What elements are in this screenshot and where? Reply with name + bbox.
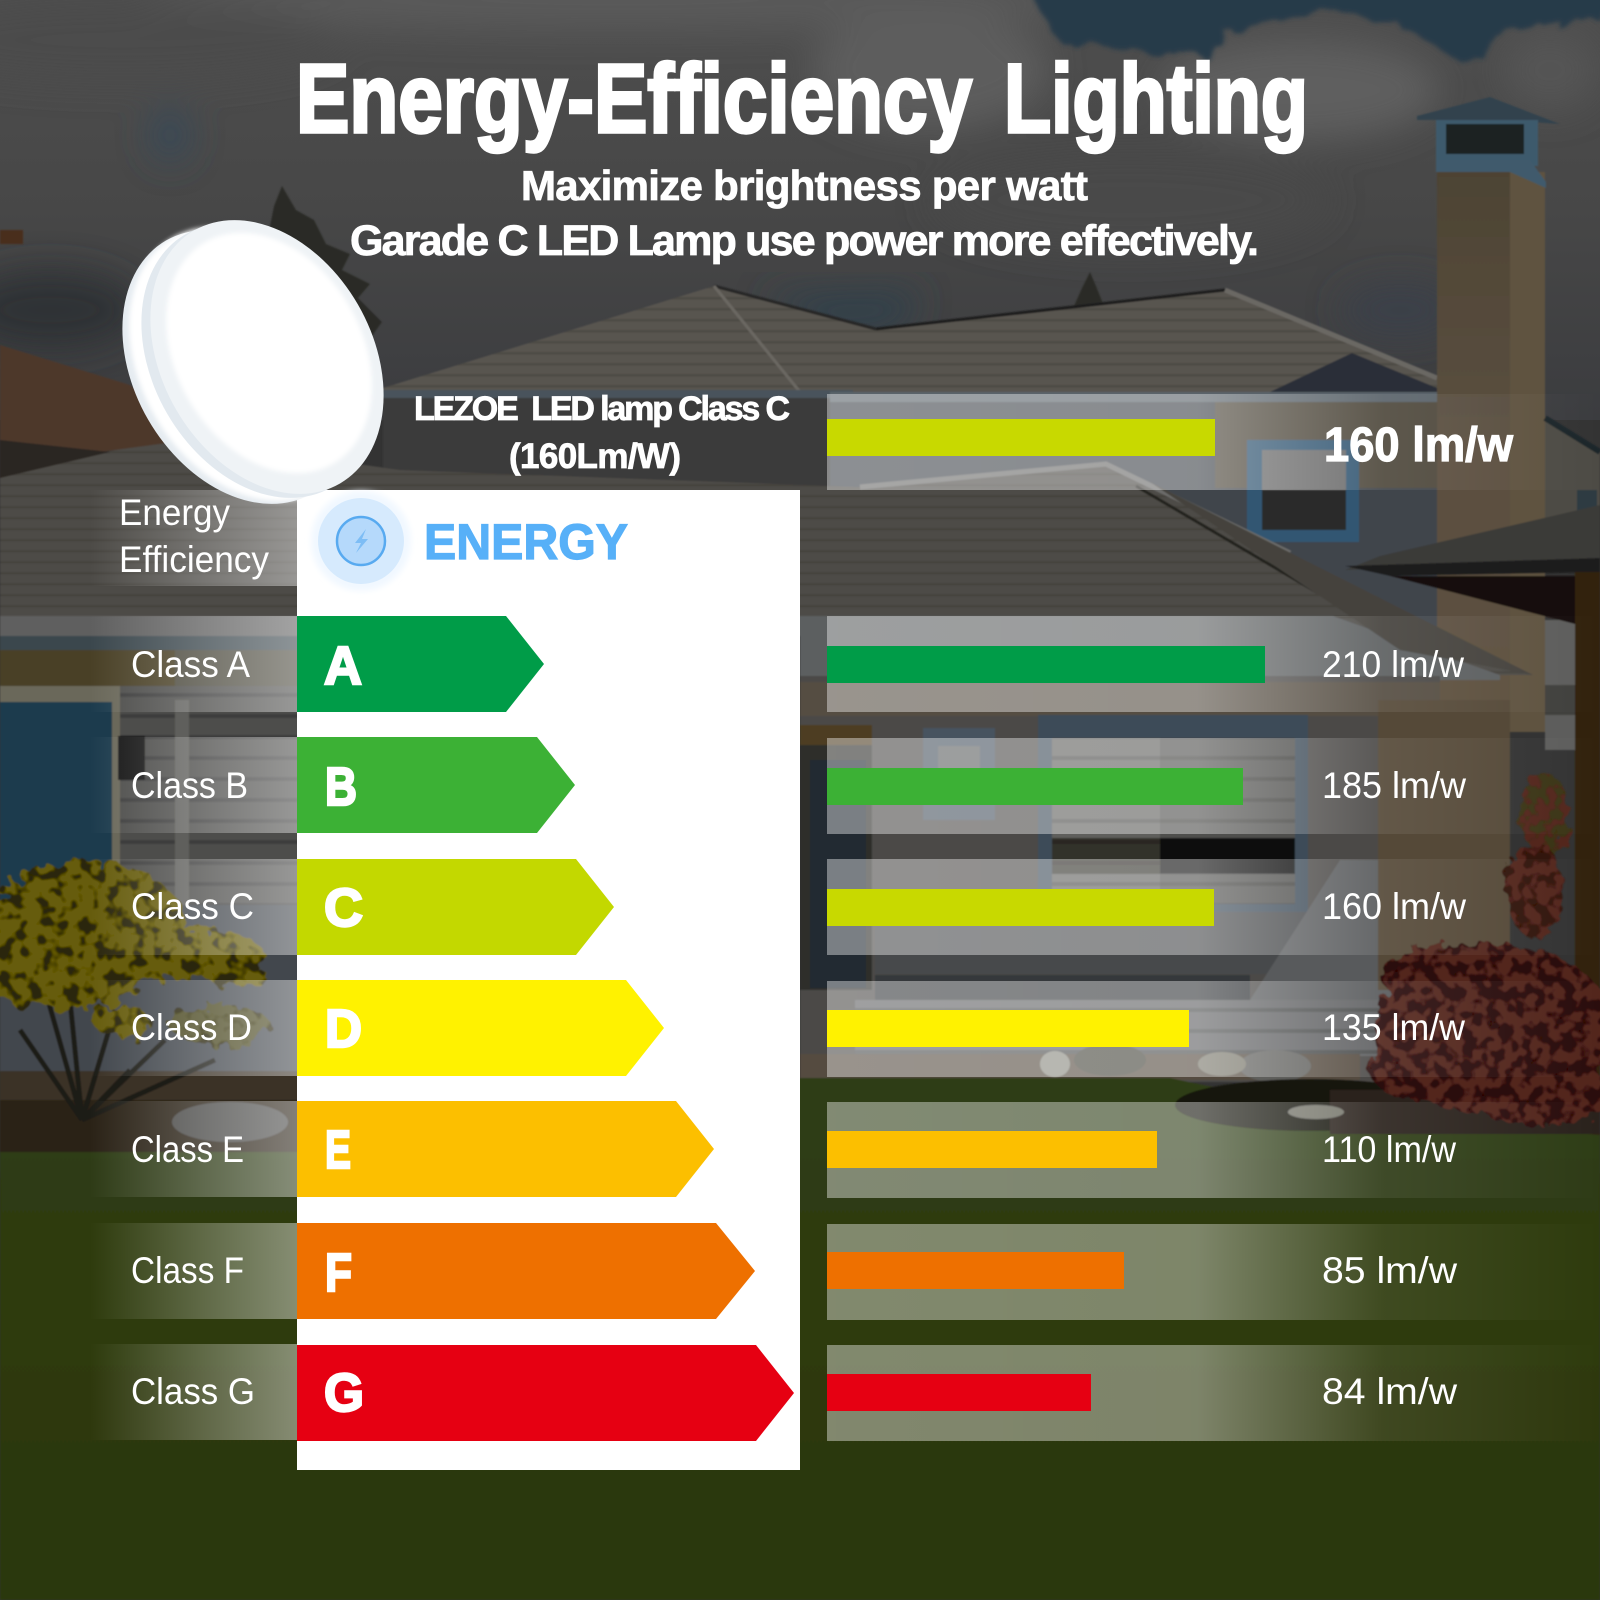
yellow shrub [0,861,270,1120]
arrow: class B: B [325,757,357,817]
arrow: class F [297,1223,755,1319]
subtitle [350,162,1259,265]
product label: (160Lm/W) [509,437,681,476]
row labels [119,492,269,1412]
bar: class G 84 lm/w [827,1374,1091,1411]
value labels: 84 lm/w [1322,1371,1457,1412]
bar: class D 135 lm/w [827,1010,1189,1047]
lawn [0,1078,1600,1600]
panel: white energy label card [297,490,800,1470]
arrow: class F: F [325,1243,352,1303]
small right shrub [1507,773,1569,938]
subtitle: Garade C LED Lamp use power more effectively. [350,217,1259,265]
mulch and lawn shadow [0,1079,1600,1152]
row labels: Class G [131,1371,255,1412]
chimney [1417,97,1560,732]
arrow: class A [297,616,544,712]
bar: class C 160 lm/w [827,889,1214,926]
heading: ENERGY: ENERGY [424,514,628,570]
arrow: class D: D [325,999,362,1059]
bar: class E 110 lm/w [827,1131,1157,1168]
upper wall with window [383,390,1450,632]
arrow: class G: G [324,1363,364,1423]
conifer trees behind roof [266,186,1104,366]
row labels: Energy [119,492,230,533]
bar: class F 85 lm/w [827,1252,1124,1289]
icon: energy bolt badge [311,491,411,591]
icon: round LED ceiling lamp [75,178,431,546]
arrow: class E: E [325,1120,351,1180]
portico roof and column [1345,505,1600,1232]
value labels: 185 lm/w [1322,765,1466,806]
bar: LEZOE 160 lm/w [827,419,1215,456]
title: Lighting [1004,44,1308,153]
rating arrows A to G [297,616,794,1441]
arrow: class G [297,1345,794,1441]
lower wall, door and windows [800,616,1510,1082]
product label [414,390,790,476]
value labels: 110 lm/w [1322,1129,1456,1170]
left wall, garage door and siding [0,616,800,1101]
row labels: Class A [131,644,250,685]
row labels: Class C [131,886,254,927]
arrow: class A: A [324,636,362,696]
value labels [1322,644,1466,1412]
arrow: class C [297,859,614,955]
left brown roof [0,230,190,478]
value labels: 85 lm/w [1322,1250,1457,1291]
value labels: 210 lm/w [1322,644,1464,685]
value labels: 160 lm/w [1322,886,1466,927]
sky and clouds [0,0,1600,420]
right side wing beyond chimney [1545,418,1600,750]
lower roof [0,438,1533,675]
value labels: 135 lm/w [1322,1007,1465,1048]
title: Energy-Efficiency [296,44,972,153]
row labels: Class F [131,1250,244,1291]
arrow: class B [297,737,575,833]
subtitle: Maximize brightness per watt [521,162,1088,209]
row labels: Efficiency [119,539,269,580]
product label: LEZOE LED lamp Class C [414,390,790,428]
bar: class B 185 lm/w [827,768,1243,805]
red shrub [1370,945,1600,1125]
panel: right value bands [827,394,1600,1441]
bar: class A 210 lm/w [827,646,1265,683]
panel: left label bands [90,490,297,1440]
arrow: class C: C [324,878,363,938]
bar chart: lumens per watt [827,419,1265,1411]
row labels: Class D [131,1007,252,1048]
arrow: class D [297,980,664,1076]
product value: 160 lm/w [1324,419,1514,472]
arrow: class E [297,1101,714,1197]
upper main roof [383,286,1437,400]
row labels: Class B [131,765,248,806]
row labels: Class E [131,1129,244,1170]
